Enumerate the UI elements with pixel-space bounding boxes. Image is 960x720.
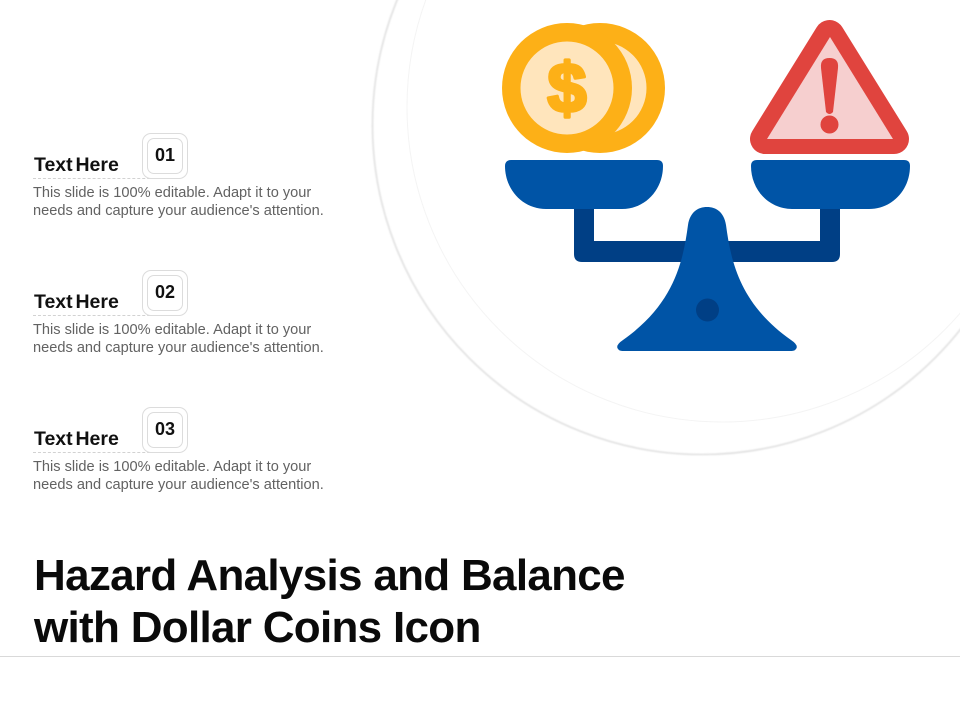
number badge 02 xyxy=(142,270,188,316)
number badge 03: 03 xyxy=(155,419,175,439)
heading: item 03: Text Here xyxy=(34,428,119,450)
text block: item 01 xyxy=(33,185,324,219)
text block: item 01: needs and capture your audience's attention. xyxy=(33,203,324,219)
text block: item 03: needs and capture your audience's attention. xyxy=(33,477,324,493)
list item 02 xyxy=(33,270,324,356)
heading: item 01: Text Here xyxy=(34,154,119,176)
list item 03 xyxy=(33,407,324,493)
icon: left scale pan xyxy=(505,160,663,209)
text block: item 01: This slide is 100% editable. Adapt it to your xyxy=(33,185,311,201)
title: with Dollar Coins Icon xyxy=(34,603,481,652)
title: Hazard Analysis and Balance xyxy=(34,551,625,600)
number badge 01 xyxy=(142,133,188,179)
icon: hazard warning triangle xyxy=(765,35,894,139)
number badge 01: 01 xyxy=(155,145,175,165)
list item 01 xyxy=(33,133,324,219)
number badge 02: 02 xyxy=(155,282,175,302)
text block: item 02: needs and capture your audience's attention. xyxy=(33,340,324,356)
icon: scale base xyxy=(617,207,797,351)
number badge 03 xyxy=(142,407,188,453)
icon: dollar coins xyxy=(502,23,665,153)
text block: item 03: This slide is 100% editable. Adapt it to your xyxy=(33,459,311,475)
text block: item 02: This slide is 100% editable. Adapt it to your xyxy=(33,322,311,338)
icon: dollar coins: $ xyxy=(548,49,586,127)
text block: item 03 xyxy=(33,459,324,493)
text block: item 02 xyxy=(33,322,324,356)
heading: item 02: Text Here xyxy=(34,291,119,313)
title xyxy=(34,551,625,652)
icon: right scale pan xyxy=(751,160,910,209)
icon: scale arm xyxy=(574,205,840,262)
